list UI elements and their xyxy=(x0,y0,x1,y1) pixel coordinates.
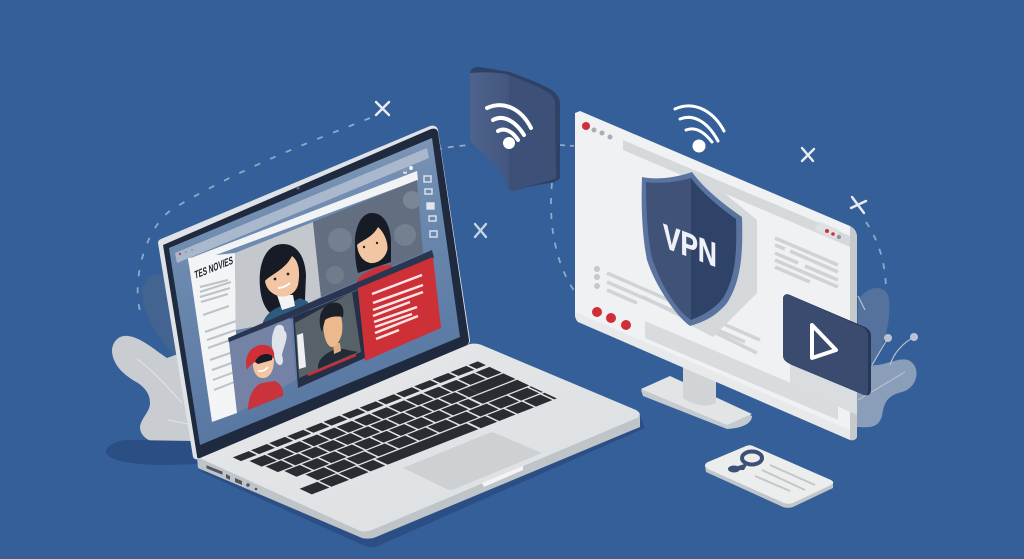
monitor stand xyxy=(641,360,752,429)
laptop deck xyxy=(197,344,640,532)
monitor title dots xyxy=(582,122,612,140)
monitor red dots xyxy=(592,307,631,330)
laptop lid silver xyxy=(158,126,470,459)
phone card xyxy=(705,445,833,508)
laptop trackpad notch xyxy=(482,466,523,487)
video scrub bar xyxy=(308,355,356,375)
dashed connection arc centre xyxy=(551,183,575,292)
article title: TES NOVIES xyxy=(194,254,233,281)
shield drop shadow xyxy=(690,173,757,337)
red text panel xyxy=(358,257,441,361)
icon: wifi on shield xyxy=(487,105,531,149)
person: woman left xyxy=(260,244,309,330)
dashed connection monitor to wifi shield xyxy=(560,145,574,146)
laptop ports xyxy=(207,466,257,490)
monitor bullets xyxy=(594,266,600,289)
monitor wifi icon xyxy=(675,106,724,152)
play card shadow xyxy=(790,363,857,415)
white article panel xyxy=(188,253,237,422)
video player panel xyxy=(293,290,365,388)
sidebar icons xyxy=(424,176,437,237)
floating wifi shield xyxy=(470,67,560,191)
monitor text lines right xyxy=(775,238,838,287)
laptop xyxy=(158,126,645,547)
laptop camera xyxy=(296,186,300,190)
browser dots xyxy=(179,166,413,255)
article lines xyxy=(200,280,237,390)
monitor body xyxy=(575,111,857,440)
mottled video tile xyxy=(313,180,423,297)
laptop lid bezel xyxy=(163,129,469,458)
grey video tile xyxy=(235,222,321,330)
dashed connection laptop to wifi shield xyxy=(436,145,470,150)
sparkle x marks xyxy=(376,102,866,237)
white tab bar xyxy=(188,171,418,265)
laptop rubber foot xyxy=(436,350,445,356)
left background leaves xyxy=(112,274,198,445)
monitor bottom grey box xyxy=(645,321,838,420)
card lines xyxy=(755,465,815,491)
dashed connection arc left xyxy=(138,118,370,318)
monitor bottom bezel xyxy=(575,312,850,440)
icon: play triangle xyxy=(812,325,836,358)
laptop keyboard xyxy=(237,363,551,492)
right background leaves xyxy=(856,288,918,427)
monitor text lines left xyxy=(607,273,760,353)
play card xyxy=(783,294,871,395)
laptop display xyxy=(169,138,460,445)
ground shadow under laptop hinge xyxy=(106,440,200,465)
person: man xyxy=(318,303,358,369)
VPN shield xyxy=(642,172,742,326)
monitor address bar xyxy=(623,140,850,247)
monitor xyxy=(575,106,871,440)
lower video frame xyxy=(228,250,434,343)
white strip xyxy=(297,333,306,369)
person: kid xyxy=(246,345,283,410)
laptop base shadow xyxy=(197,415,645,547)
VPN label: VPN xyxy=(663,216,717,275)
card icon xyxy=(728,452,762,472)
dashed connection arc right xyxy=(866,222,886,292)
monitor right edge xyxy=(850,226,857,440)
browser top bar xyxy=(175,148,429,263)
person: woman right xyxy=(355,213,393,286)
monitor window controls xyxy=(815,221,841,239)
laptop base front edge xyxy=(197,416,640,539)
kid video panel xyxy=(229,318,296,413)
laptop trackpad xyxy=(403,432,542,490)
